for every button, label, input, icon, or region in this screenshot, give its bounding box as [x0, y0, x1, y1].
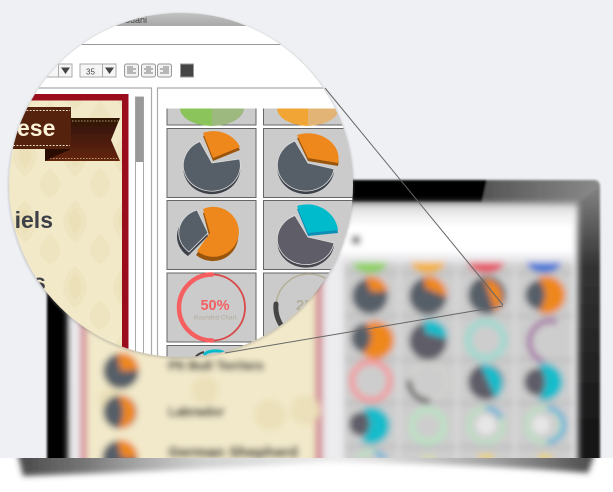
align right button — [158, 64, 172, 77]
poster list: Labrador: Labrador — [168, 404, 224, 419]
poster list: German Shepherd: German Shepherd — [168, 444, 298, 461]
poster on screen — [76, 278, 326, 458]
ribbon back — [45, 118, 120, 161]
poster heading fragment: iels — [15, 207, 53, 233]
laptop drop shadow — [14, 458, 598, 480]
top row half pies — [353, 262, 561, 273]
orange half pie — [277, 108, 339, 126]
ribbon front: ese — [17, 115, 55, 141]
scrollbar — [136, 97, 144, 357]
align center button — [142, 64, 156, 77]
font dropdown — [46, 64, 72, 78]
align left button — [124, 64, 138, 77]
left panel frame — [38, 87, 152, 354]
pie: teal slice — [277, 204, 338, 268]
window title bar: ouani — [125, 15, 147, 25]
pie: slice top right — [183, 131, 240, 194]
chart grid cells — [167, 100, 354, 376]
row 3 charts — [352, 362, 563, 401]
poster frame — [31, 94, 128, 349]
blurred laptop — [47, 180, 600, 476]
right panel frame — [156, 87, 324, 356]
row 1 pies — [352, 276, 565, 315]
rounded chart 25%: 25% — [296, 297, 326, 314]
rounded chart 50%: Rounded Chart — [194, 314, 237, 322]
poster paper — [9, 100, 122, 346]
magnifier lens — [7, 12, 354, 360]
rounded chart 50%: 50% — [200, 298, 230, 314]
poster list: Pit Bull Terriers: Pit Bull Terriers — [168, 358, 264, 373]
toolbar divider — [81, 44, 281, 45]
laptop screen contents, out of focus — [68, 203, 578, 476]
chart panel on screen — [344, 262, 573, 472]
partial chart, bottom row — [195, 351, 226, 358]
size dropdown: 35 — [86, 68, 95, 76]
row 2 charts — [351, 320, 557, 362]
ribbon front — [12, 107, 71, 149]
rounded chart 25%: Rounded Chart — [296, 314, 339, 322]
green half pie — [180, 108, 244, 126]
poster list: German Shepherd — [98, 436, 302, 458]
zoom cone lines — [225, 88, 503, 353]
poster list: Labrador — [103, 395, 224, 429]
poster list: Pit Bull Terriers — [103, 353, 264, 389]
rounded chart 50% — [179, 274, 245, 340]
window title bar — [116, 13, 246, 26]
pie: larger slice — [277, 133, 339, 194]
white mask over panel top — [166, 100, 335, 108]
size dropdown — [80, 64, 116, 77]
row 4 charts — [349, 407, 564, 445]
row 5 charts — [358, 452, 552, 458]
colour swatch — [180, 64, 194, 77]
toolbar — [30, 64, 194, 77]
laptop bezel — [47, 180, 600, 470]
poster text fragment: s — [33, 269, 46, 295]
rounded chart 25% — [276, 274, 342, 340]
pie: majority orange — [177, 207, 239, 261]
screen toolbar — [339, 222, 575, 255]
